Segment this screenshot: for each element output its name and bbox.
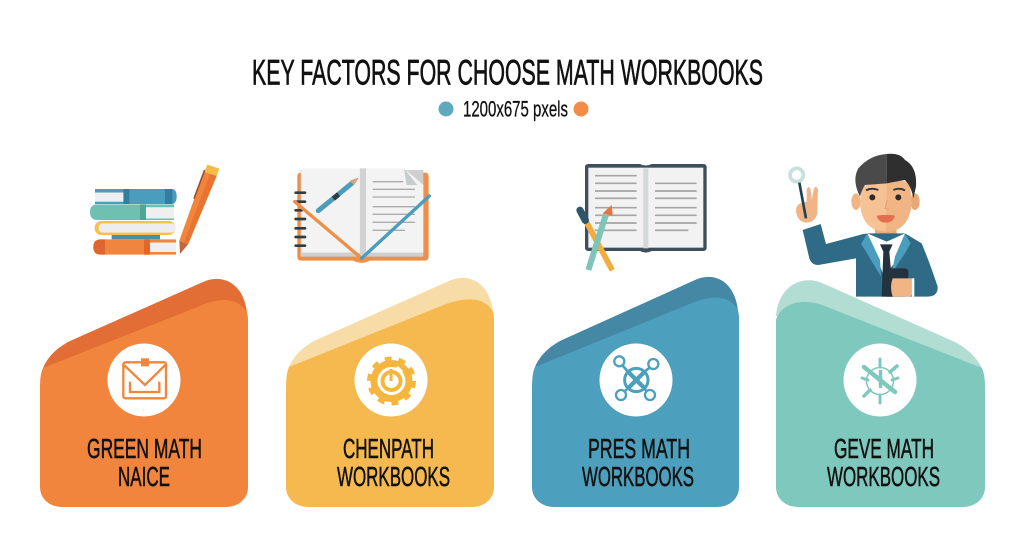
label: GREEN MATH: [87, 433, 202, 464]
label: [827, 433, 940, 492]
label: [582, 433, 694, 492]
panel: geve math workbooks (teal): [776, 280, 985, 507]
icon: open book with pencils: [580, 164, 707, 270]
icon: network nodes in circle: [600, 344, 672, 416]
icon: spiral notebook with pen: [295, 168, 429, 263]
label: CHENPATH: [343, 433, 434, 464]
icon: businessman holding a pointer: [790, 154, 938, 297]
icon: stack of books and pen: [90, 165, 219, 255]
panel: green math naice (orange): [40, 279, 248, 507]
panel: pres math workbooks (blue): [532, 277, 739, 507]
icon: crossed wheel in circle: [844, 344, 916, 416]
label: WORKBOOKS: [827, 461, 940, 492]
label: WORKBOOKS: [337, 461, 450, 492]
label: GEVE MATH: [834, 433, 934, 464]
icon: gear in circle: [354, 344, 428, 416]
icon: envelope in circle: [108, 344, 180, 416]
subtitle with dots: 1200x675 pxels: [463, 96, 568, 122]
label: NAICE: [118, 461, 170, 492]
label: WORKBOOKS: [582, 461, 694, 492]
label: [87, 433, 202, 492]
label: [337, 433, 450, 492]
label: PRES MATH: [588, 433, 690, 464]
panel: chenpath workbooks (yellow): [286, 278, 494, 507]
